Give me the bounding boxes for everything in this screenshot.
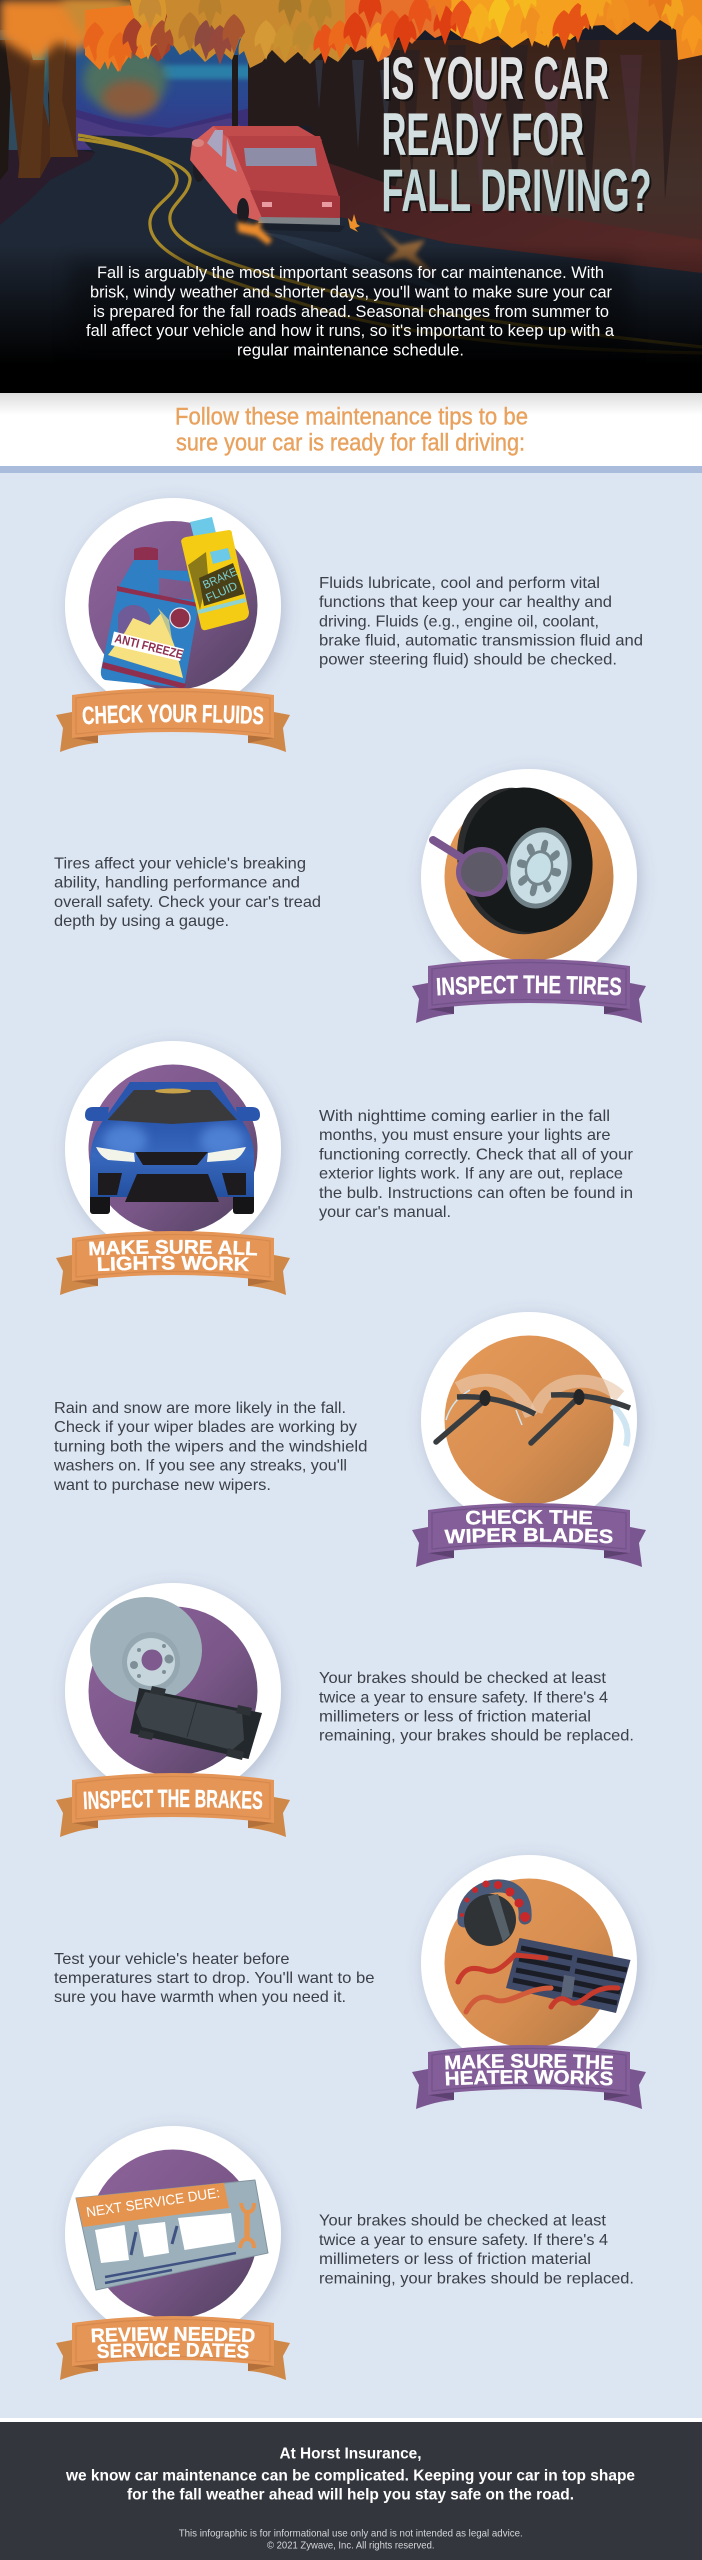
text: heater: Test your vehicle's heater before (54, 1951, 290, 1968)
text: tires (54, 856, 321, 930)
panel: hero illustration (0, 0, 702, 393)
panel: footer (0, 2422, 702, 2560)
disclaimer: © 2021 Zywave, Inc. All rights reserved. (267, 2540, 434, 2552)
closing message: At Horst Insurance, (280, 2446, 422, 2462)
text: heater (54, 1951, 375, 2006)
closing message: we know car maintenance can be complicated. Keeping your car in top shape (65, 2468, 635, 2484)
ribbon: check the wiper blades: WIPER BLADES (444, 1528, 612, 1544)
ribbon: make sure all lights work: MAKE SURE ALL (89, 1240, 258, 1256)
ribbon: check the wiper blades: CHECK THE (466, 1510, 592, 1525)
text: tires: depth by using a gauge. (54, 913, 229, 930)
text: lights: your car's manual. (319, 1204, 451, 1221)
ribbon: review needed service dates: SERVICE DATES (97, 2342, 248, 2358)
ribbon: make sure all lights work (56, 1231, 290, 1295)
text: wipers (53, 1400, 368, 1494)
intro paragraph: fall affect your vehicle and how it runs, so it's important to keep up with a (86, 321, 615, 340)
intro paragraph: Fall is arguably the most important seasons for car maintenance. With (97, 263, 604, 282)
intro paragraph: is prepared for the fall roads ahead. Seasonal changes from summer to (93, 302, 609, 321)
ribbon: review needed service dates (56, 2316, 290, 2380)
panel: make sure all lights work (56, 1039, 634, 1295)
text: wipers: Check if your wiper blades are working by (54, 1419, 357, 1436)
text: heater: sure you have warmth when you need it. (54, 1989, 346, 2006)
ribbon: check the wiper blades (412, 1503, 646, 1567)
icon: antifreeze jug (101, 547, 199, 689)
text: service dates: remaining, your brakes should be replaced. (319, 2270, 634, 2288)
orange disc (444, 1336, 614, 1504)
icon: blurred leaf (237, 220, 272, 245)
panel: make sure the heater works (54, 1853, 646, 2109)
panel: review needed service dates (56, 2124, 634, 2380)
label: anti freeze: ANTI FREEZE (113, 631, 185, 662)
closing message (65, 2446, 635, 2504)
text: heater: temperatures start to drop. You'll want to be (54, 1970, 375, 1987)
ribbon: inspect the brakes (56, 1773, 290, 1837)
text: fluids: brake fluid, automatic transmission fluid and (319, 632, 643, 650)
label: brake fluid: BRAKE (201, 566, 239, 592)
text: tires: Tires affect your vehicle's breaking (54, 856, 306, 872)
ribbon: make sure the heater works (412, 2045, 646, 2109)
badge circle (421, 1312, 637, 1528)
text: lights: With nighttime coming earlier in the fall (319, 1108, 610, 1125)
purple disc (88, 2150, 258, 2318)
label: brake fluid (201, 566, 239, 605)
panel: inspect the tires (54, 767, 646, 1023)
text: service dates (319, 2212, 634, 2288)
text: lights: functioning correctly. Check that all of your (319, 1146, 634, 1164)
ribbon: inspect the tires (412, 959, 646, 1023)
intro paragraph (86, 263, 615, 360)
text: service dates: twice a year to ensure safety. If there's 4 (319, 2232, 608, 2249)
purple disc (88, 521, 258, 690)
icon: brake disc and pad (90, 1597, 262, 1760)
badge circle (65, 498, 281, 714)
label: next service due: NEXT SERVICE DUE: (85, 2184, 221, 2220)
badge circle (65, 1583, 281, 1799)
heading: follow these tips: Follow these maintenance tips to be (175, 404, 528, 430)
text: wipers: turning both the wipers and the windshield (54, 1438, 368, 1456)
ribbon: make sure the heater works: MAKE SURE THE (445, 2054, 613, 2070)
ribbon: check your fluids: CHECK YOUR FLUIDS (82, 704, 264, 724)
ribbon: inspect the tires: INSPECT THE TIRES (436, 975, 622, 996)
intro paragraph: brisk, windy weather and shorter days, you'll want to make sure your car (90, 282, 612, 302)
text: tires: ability, handling performance and (54, 874, 300, 892)
icon: red car (190, 126, 345, 232)
text: brakes: remaining, your brakes should be replaced. (319, 1728, 634, 1744)
icon: blue car front (85, 1082, 260, 1214)
text: fluids: Fluids lubricate, cool and perform vital (319, 575, 600, 592)
disclaimer (179, 2528, 523, 2552)
text: fluids: driving. Fluids (e.g., engine oil, coolant, (319, 614, 599, 630)
text: lights: months, you must ensure your lights are (319, 1127, 611, 1144)
icon: service card (76, 2180, 268, 2290)
orange disc (444, 1878, 614, 2048)
icon: brake fluid bottle (181, 517, 249, 630)
title (382, 45, 652, 224)
icon: small leaf (348, 214, 360, 232)
text: brakes: Your brakes should be checked at least (319, 1670, 607, 1687)
text: wipers: want to purchase new wipers. (53, 1477, 271, 1494)
panel: inspect the brakes (56, 1581, 634, 1837)
text: lights: the bulb. Instructions can often be found in (319, 1185, 633, 1202)
panel: check the wiper blades (53, 1310, 646, 1567)
disclaimer: This infographic is for informational use only and is not intended as legal advice. (179, 2528, 523, 2540)
ribbon: make sure the heater works: HEATER WORKS (446, 2070, 612, 2086)
ribbon: review needed service dates: REVIEW NEEDED (92, 2326, 255, 2342)
text: wipers: washers on. If you see any streaks, you'll (53, 1458, 347, 1474)
panel: check your fluids (56, 496, 643, 752)
icon: wipers (436, 1380, 630, 1446)
icon: tire and gauge (433, 774, 608, 947)
footer white rule (0, 2418, 702, 2422)
text: fluids (319, 575, 643, 668)
closing message: for the fall weather ahead will help you stay safe on the road. (127, 2486, 574, 2504)
text: service dates: Your brakes should be checked at least (319, 2212, 607, 2230)
text: tires: overall safety. Check your car's tread (54, 894, 321, 911)
badge circle (65, 1041, 281, 1257)
text: wipers: Rain and snow are more likely in the fall. (54, 1400, 346, 1417)
text: fluids: functions that keep your car healthy and (319, 594, 612, 611)
text: lights: exterior lights work. If any are out, replace (319, 1166, 623, 1182)
ribbon: check your fluids (56, 688, 290, 752)
icon: heater knob and vent (458, 1880, 630, 2013)
blue divider bar (0, 466, 702, 473)
orange disc (444, 792, 614, 961)
badge circle (65, 2126, 281, 2342)
text: brakes (319, 1670, 634, 1744)
ribbon: make sure all lights work: LIGHTS WORK (98, 1256, 250, 1272)
badge circle (421, 769, 637, 985)
panel: white intro band (0, 393, 702, 466)
ribbon: inspect the brakes: INSPECT THE BRAKES (84, 1789, 262, 1810)
text: lights (319, 1108, 634, 1221)
text: brakes: twice a year to ensure safety. If there's 4 (319, 1690, 608, 1706)
text: service dates: millimeters or less of friction material (319, 2251, 591, 2268)
text: fluids: power steering fluid) should be checked. (319, 652, 617, 668)
label: brake fluid: FLUID (204, 580, 239, 605)
purple disc (88, 1064, 258, 1234)
heading: follow these tips (175, 404, 528, 456)
leaf canopy (0, 0, 702, 72)
purple disc (88, 1606, 258, 1776)
heading: follow these tips: sure your car is ready for fall driving: (176, 430, 525, 456)
icon: large blurred leaf (375, 225, 435, 275)
text: brakes: millimeters or less of friction material (319, 1708, 591, 1726)
badge circle (421, 1855, 637, 2071)
intro paragraph: regular maintenance schedule. (237, 340, 464, 360)
